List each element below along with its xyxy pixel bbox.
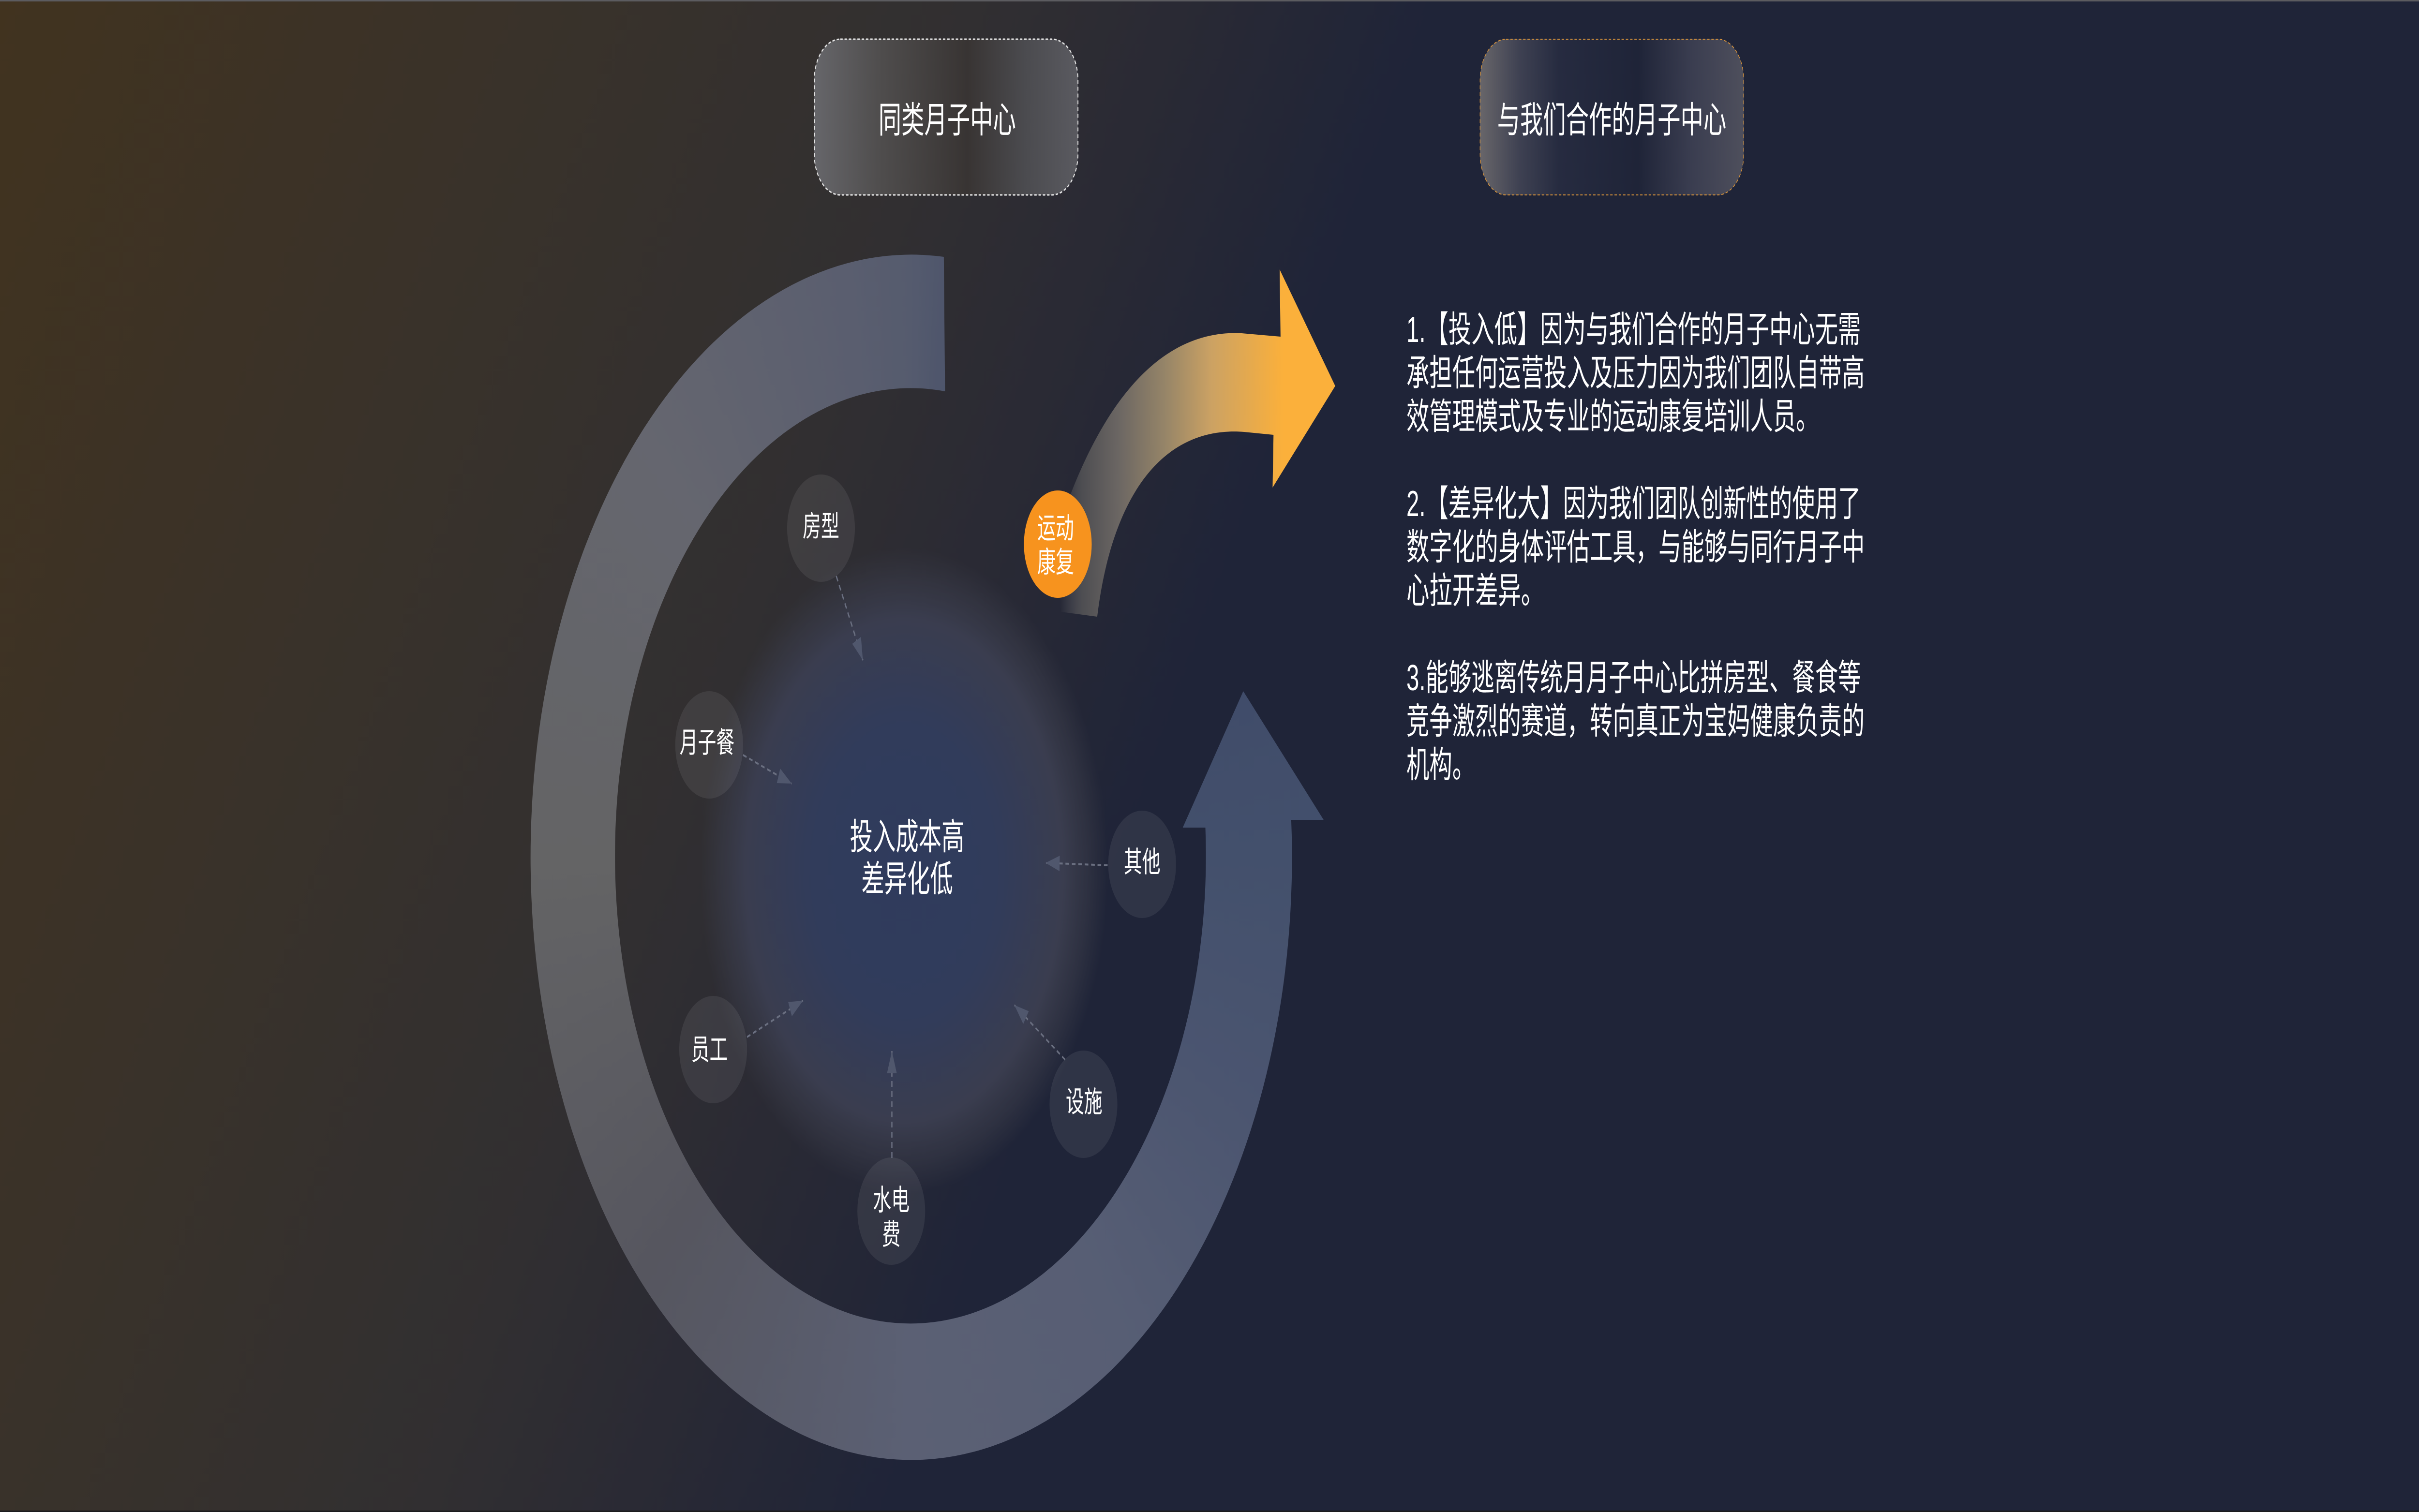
node: utilities	[857, 1157, 925, 1265]
orange curved arrow	[1036, 269, 1335, 617]
node: facilities: 设施	[1066, 1086, 1103, 1118]
heading: partner centers	[1480, 39, 1744, 195]
node: exercise rehabilitation: 运动	[1037, 512, 1074, 545]
arrow: room type to center	[836, 576, 863, 660]
text block: advantages: 心拉开差异。	[1406, 571, 1544, 611]
text block: advantages: 1.【投入低】因为与我们合作的月子中心无需	[1406, 310, 1861, 350]
text block: advantages: 竞争激烈的赛道，转向真正为宝妈健康负责的	[1406, 701, 1865, 742]
text block: advantages: 2.【差异化大】因为我们团队创新性的使用了	[1406, 484, 1861, 524]
arrow: other to center	[1045, 863, 1107, 865]
text block: advantages: 3.能够逃离传统月月子中心比拼房型、餐食等	[1406, 658, 1861, 698]
node: facilities	[1049, 1051, 1118, 1158]
node: staff: 员工	[691, 1034, 728, 1066]
arrow: meals to center	[743, 755, 791, 784]
node: exercise rehabilitation	[1024, 490, 1092, 598]
node: utilities: 水电	[873, 1184, 910, 1216]
node: other	[1108, 811, 1176, 918]
heading: similar centers	[814, 39, 1078, 195]
node: confinement meals	[675, 691, 743, 799]
node: room type	[787, 474, 855, 582]
arrow: facilities to center	[1015, 1005, 1065, 1060]
text block: advantages: 承担任何运营投入及压力因为我们团队自带高	[1406, 353, 1865, 394]
center glow with label	[700, 548, 1108, 1194]
center glow with label: 差异化低	[861, 859, 953, 900]
node: other: 其他	[1124, 846, 1161, 878]
node: room type: 房型	[803, 510, 839, 543]
text block: advantages	[1406, 310, 1865, 786]
text block: advantages: 机构。	[1406, 745, 1475, 786]
heading: partner centers: 与我们合作的月子中心	[1497, 100, 1726, 141]
text block: advantages: 数字化的身体评估工具，与能够与同行月子中	[1406, 527, 1865, 568]
arrow: staff to center	[747, 1001, 803, 1037]
node: exercise rehabilitation: 康复	[1037, 546, 1074, 578]
arrow: utilities to center	[891, 1051, 893, 1158]
heading: similar centers: 同类月子中心	[879, 100, 1016, 141]
node: confinement meals: 月子餐	[680, 726, 734, 759]
text block: advantages: 效管理模式及专业的运动康复培训人员。	[1406, 397, 1819, 437]
node: utilities: 费	[882, 1218, 900, 1251]
center glow with label: 投入成本高	[850, 817, 964, 858]
circular arrow: large ring	[530, 254, 1324, 1460]
node: staff	[679, 996, 747, 1103]
